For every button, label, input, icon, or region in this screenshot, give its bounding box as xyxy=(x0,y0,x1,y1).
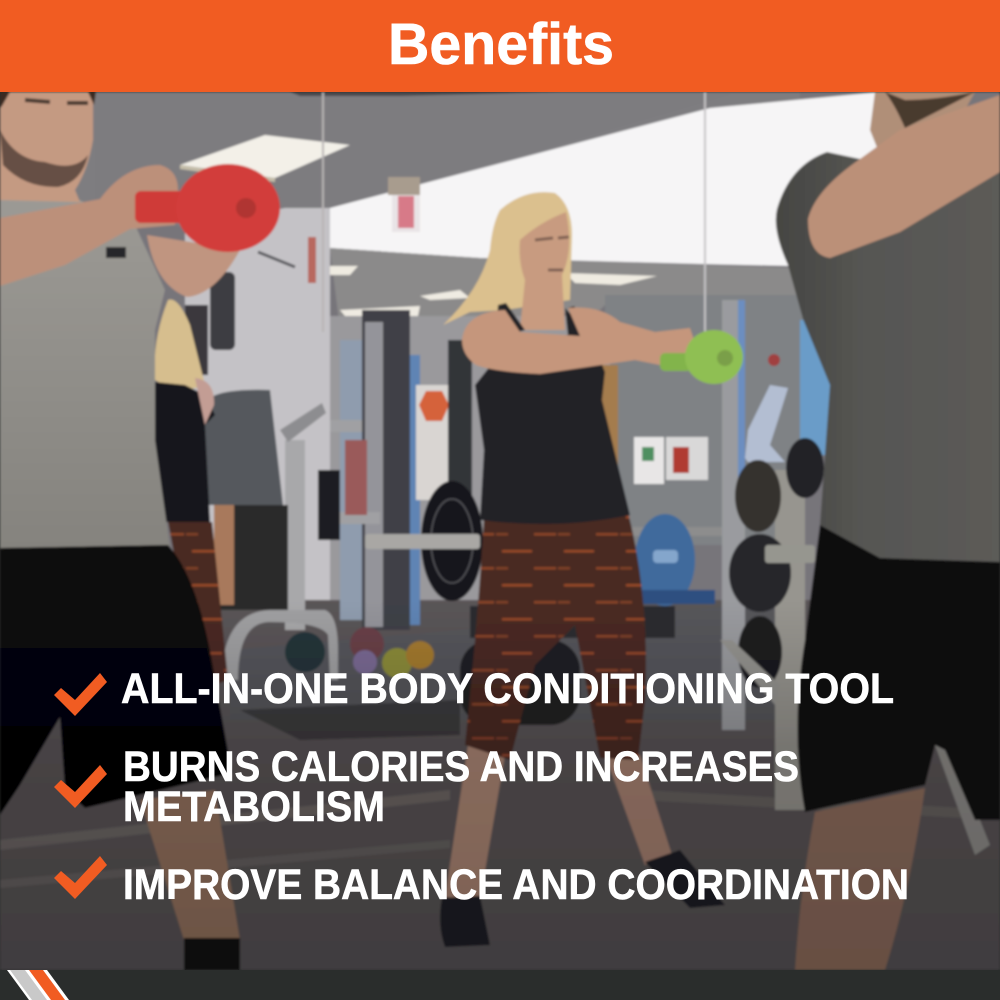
green kettlebell xyxy=(660,330,743,384)
benefit text 2: BURNS CALORIES AND INCREASES xyxy=(123,744,799,791)
left man xyxy=(0,92,280,970)
hair xyxy=(0,92,96,108)
benefits list xyxy=(54,666,909,909)
mirror and rack posts xyxy=(322,92,745,730)
grey shirt xyxy=(0,195,170,552)
right man xyxy=(776,92,1000,970)
beard xyxy=(885,92,975,128)
head and neck xyxy=(870,92,975,155)
far arm xyxy=(147,235,240,297)
picture frame on wall xyxy=(185,305,208,375)
fire alarm xyxy=(768,354,780,366)
dark shirt xyxy=(776,120,1000,562)
machine seat xyxy=(204,272,338,680)
gym equipment: weight stack tower xyxy=(318,310,472,630)
leg xyxy=(795,788,925,970)
dumbbell rack xyxy=(720,438,824,810)
left wall xyxy=(185,208,330,620)
footer bar xyxy=(0,970,1000,1000)
red kettlebell xyxy=(135,164,280,252)
black tank top xyxy=(475,305,630,524)
benefit text 1: ALL-IN-ONE BODY CONDITIONING TOOL xyxy=(121,666,894,713)
lower ceiling band xyxy=(330,248,800,330)
benefit text 3: IMPROVE BALANCE AND COORDINATION xyxy=(123,862,909,909)
gym floor xyxy=(0,600,1000,970)
legs xyxy=(445,745,505,900)
title: Benefits xyxy=(388,12,614,77)
central woman xyxy=(440,192,743,947)
black shorts xyxy=(798,525,1000,820)
wall pin xyxy=(258,252,295,267)
face and neck xyxy=(520,212,569,330)
hair xyxy=(443,192,572,325)
straps xyxy=(498,303,592,336)
under armour logo xyxy=(106,247,126,258)
patterned leggings xyxy=(465,512,646,760)
title banner xyxy=(0,0,1000,92)
icon: check 3 xyxy=(54,856,107,899)
darkening overlay xyxy=(0,600,1000,970)
beard xyxy=(0,130,88,187)
brown door xyxy=(600,365,618,490)
black shorts xyxy=(0,545,232,815)
bench xyxy=(470,606,675,638)
arms xyxy=(462,308,700,374)
eyes xyxy=(25,100,88,103)
icon: check 2 xyxy=(54,765,107,808)
leg xyxy=(140,790,240,940)
wall safety boxes xyxy=(634,437,708,484)
exit sign xyxy=(388,177,420,232)
icon: check 1 xyxy=(54,673,107,716)
sock xyxy=(184,938,240,970)
facial shadows xyxy=(535,237,569,270)
bright mirror wall xyxy=(330,92,880,268)
rack leg xyxy=(935,745,990,855)
shoes xyxy=(440,896,490,947)
barbell and plates xyxy=(365,481,722,606)
footer stripes logo xyxy=(7,970,69,1000)
treadmill xyxy=(745,385,788,462)
poster xyxy=(416,385,452,500)
medicine balls xyxy=(285,627,580,725)
benefit text 2 second line: METABOLISM xyxy=(123,784,385,831)
arm and hand xyxy=(0,165,178,286)
red wall sign xyxy=(308,237,316,283)
arm xyxy=(808,95,1000,258)
blue wall strip xyxy=(800,320,832,455)
far gym wall xyxy=(605,295,805,545)
head xyxy=(0,92,93,202)
woman in background left xyxy=(155,300,228,690)
gym ceiling xyxy=(0,92,800,230)
